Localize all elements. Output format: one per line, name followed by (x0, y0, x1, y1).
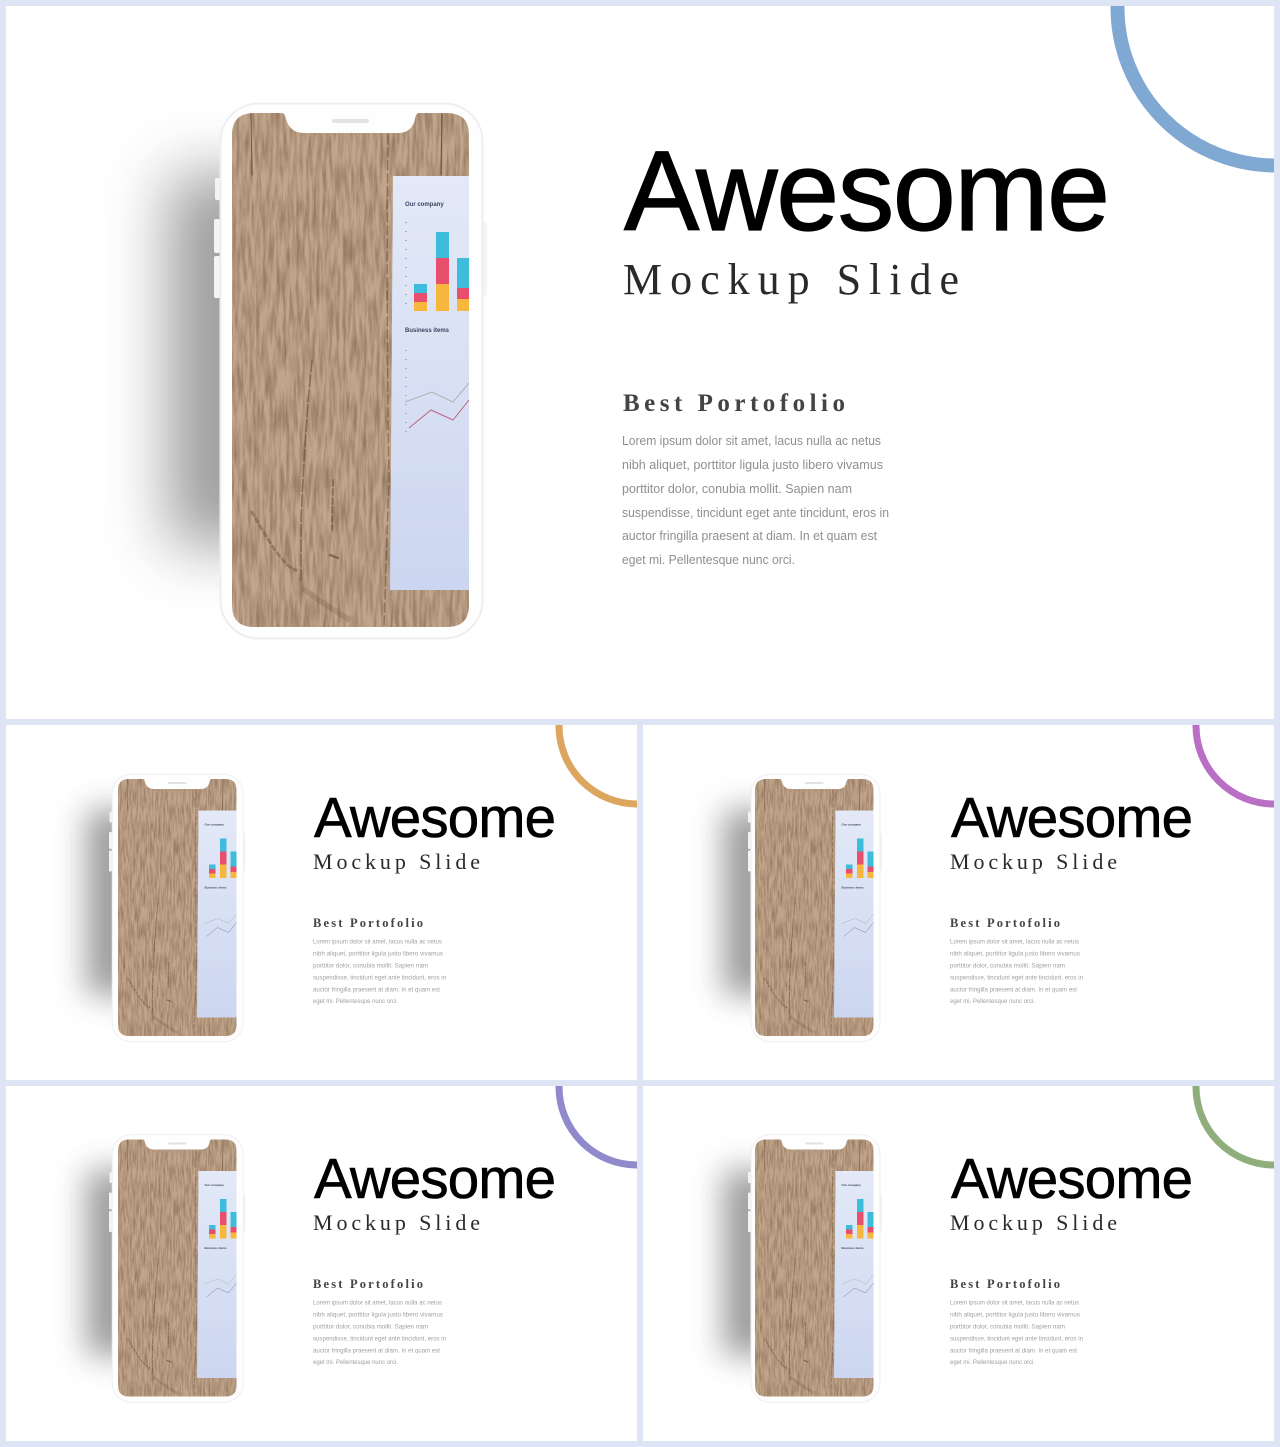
body copy: porttitor dolor, conubia mollit. Sapien nam (622, 482, 852, 496)
phone mockup (724, 1135, 882, 1402)
title: Awesome (314, 786, 556, 849)
phone screen (118, 1140, 236, 1396)
phone mockup (170, 104, 487, 638)
line chart (204, 914, 236, 936)
chart title: Our company: Our company (204, 1183, 224, 1187)
phone screen (118, 779, 236, 1036)
chart title: Our company: Our company (204, 822, 224, 826)
arc: blue corner (1118, 0, 1280, 166)
body copy (950, 938, 1083, 1005)
phone shadow (724, 1170, 774, 1356)
body copy: nibh aliquet, porttitor ligula justo libero vivamus (950, 1312, 1080, 1318)
chart title: Business items: Business items (405, 328, 450, 334)
wood background (118, 779, 236, 1036)
body copy: nibh aliquet, porttitor ligula justo libero vivamus (950, 950, 1080, 958)
paper sheet (834, 1171, 874, 1378)
phone body (112, 774, 243, 1042)
body copy (622, 434, 889, 567)
phone body (112, 1135, 243, 1402)
phone body (220, 104, 482, 638)
panel: green slide (643, 1009, 1280, 1441)
arc: purple corner (1196, 648, 1280, 804)
panel: purple slide (643, 648, 1280, 1080)
phone side buttons (109, 1172, 246, 1232)
body copy: auctor fringilla praesent at diam. In et quam est (313, 986, 440, 994)
arc: green corner (1196, 1009, 1280, 1165)
subtitle: Mockup Slide (950, 1210, 1117, 1235)
paper sheet (197, 810, 236, 1018)
subtitle: Mockup Slide (950, 849, 1117, 874)
body copy: suspendisse, tincidunt eget ante tincidunt, eros in (950, 1336, 1083, 1342)
paper sheet (197, 1171, 236, 1378)
body copy: porttitor dolor, conubia mollit. Sapien nam (950, 1324, 1065, 1330)
phone shadow (170, 175, 270, 545)
chart title: Our company: Our company (842, 822, 861, 826)
chart title: Business items: Business items (204, 1246, 227, 1250)
text block (313, 1147, 556, 1366)
subtitle: Mockup Slide (623, 255, 959, 304)
phone side buttons (214, 178, 487, 298)
phone body (751, 774, 880, 1042)
title: Awesome (951, 786, 1193, 849)
paper sheet (390, 176, 469, 590)
chart title: Our company: Our company (405, 202, 444, 208)
body copy: eget mi. Pellentesque nunc orci. (622, 553, 795, 567)
line chart (842, 1274, 874, 1297)
body copy: eget mi. Pellentesque nunc orci. (313, 998, 398, 1005)
body copy: suspendisse, tincidunt eget ante tincidunt, eros in (313, 1336, 446, 1342)
body copy: porttitor dolor, conubia mollit. Sapien nam (950, 962, 1065, 970)
phone side buttons (748, 1172, 882, 1232)
arc: orange corner (556, 725, 637, 808)
phone screen (755, 1140, 874, 1396)
panel: orange slide (6, 725, 637, 1080)
body copy: suspendisse, tincidunt eget ante tincidunt, eros in (313, 974, 446, 982)
wood background (755, 1140, 874, 1396)
wood grain and knots (251, 113, 442, 627)
line chart (405, 383, 469, 428)
wood grain and knots (128, 779, 223, 1036)
body copy: nibh aliquet, porttitor ligula justo libero vivamus (622, 458, 883, 472)
phone speaker (332, 119, 369, 123)
panel: indigo slide (6, 1009, 715, 1441)
body copy (313, 938, 446, 1005)
bar chart (414, 232, 469, 311)
body copy: auctor fringilla praesent at diam. In et quam est (622, 529, 878, 543)
bar chart (209, 838, 236, 878)
phone speaker (805, 782, 824, 784)
phone body (751, 1135, 880, 1402)
phone screen (232, 113, 469, 627)
phone shadow (87, 1170, 137, 1356)
wood grain and knots (764, 779, 860, 1036)
body copy: Lorem ipsum dolor sit amet, lacus nulla ac netus (313, 938, 442, 946)
title: Awesome (314, 1147, 556, 1210)
heading: Best Portofolio (950, 916, 1060, 930)
body copy: nibh aliquet, porttitor ligula justo libero vivamus (313, 1312, 443, 1318)
line chart (204, 1274, 236, 1297)
text block (622, 128, 1110, 567)
chart title: Business items: Business items (204, 886, 227, 890)
body copy: eget mi. Pellentesque nunc orci. (950, 998, 1035, 1005)
phone shadow (724, 810, 774, 995)
body copy: Lorem ipsum dolor sit amet, lacus nulla ac netus (950, 938, 1079, 946)
heading: Best Portofolio (313, 916, 423, 930)
heading: Best Portofolio (950, 1277, 1060, 1291)
body copy (313, 1300, 446, 1366)
paper sheet (834, 810, 874, 1018)
title: Awesome (951, 1147, 1193, 1210)
body copy: Lorem ipsum dolor sit amet, lacus nulla ac netus (313, 1300, 442, 1306)
body copy: nibh aliquet, porttitor ligula justo libero vivamus (313, 950, 443, 958)
body copy: suspendisse, tincidunt eget ante tincidunt, eros in (950, 974, 1083, 982)
panel: large blue slide (6, 0, 1280, 719)
wood background (755, 779, 874, 1036)
axis ticks (405, 222, 407, 438)
phone screen (755, 779, 874, 1036)
phone mockup (87, 1135, 246, 1402)
subtitle: Mockup Slide (313, 1210, 480, 1235)
body copy: porttitor dolor, conubia mollit. Sapien nam (313, 1324, 428, 1330)
wood grain and knots (128, 1140, 223, 1396)
body copy: auctor fringilla praesent at diam. In et quam est (313, 1348, 440, 1354)
body copy: suspendisse, tincidunt eget ante tincidunt, eros in (622, 506, 889, 520)
wood background (232, 113, 469, 627)
chart title: Business items: Business items (842, 886, 864, 890)
heading: Best Portofolio (623, 390, 845, 417)
phone shadow (87, 810, 137, 995)
bar chart (846, 1199, 874, 1238)
phone speaker (805, 1142, 824, 1144)
phone mockup (724, 774, 882, 1042)
wood background (118, 1140, 236, 1396)
body copy: porttitor dolor, conubia mollit. Sapien nam (313, 962, 428, 970)
arc: indigo corner (559, 1009, 715, 1165)
text block (950, 1147, 1193, 1366)
text block (950, 786, 1193, 1005)
body copy: auctor fringilla praesent at diam. In et quam est (950, 986, 1077, 994)
line chart (842, 914, 874, 936)
text block (313, 786, 556, 1005)
chart title: Our company: Our company (842, 1183, 861, 1187)
body copy: Lorem ipsum dolor sit amet, lacus nulla ac netus (622, 434, 881, 448)
heading: Best Portofolio (313, 1277, 423, 1291)
phone speaker (168, 1142, 186, 1144)
bar chart (209, 1199, 236, 1238)
wood grain and knots (764, 1140, 860, 1396)
title: Awesome (624, 128, 1110, 254)
phone side buttons (109, 812, 246, 872)
chart title: Business items: Business items (842, 1246, 864, 1250)
body copy: eget mi. Pellentesque nunc orci. (950, 1359, 1035, 1366)
body copy: Lorem ipsum dolor sit amet, lacus nulla ac netus (950, 1300, 1079, 1306)
phone side buttons (748, 812, 882, 872)
phone mockup (87, 774, 246, 1042)
bar chart (846, 838, 874, 878)
body copy: auctor fringilla praesent at diam. In et quam est (950, 1348, 1077, 1354)
phone speaker (168, 782, 186, 784)
body copy (950, 1300, 1083, 1366)
subtitle: Mockup Slide (313, 849, 480, 874)
body copy: eget mi. Pellentesque nunc orci. (313, 1359, 398, 1366)
